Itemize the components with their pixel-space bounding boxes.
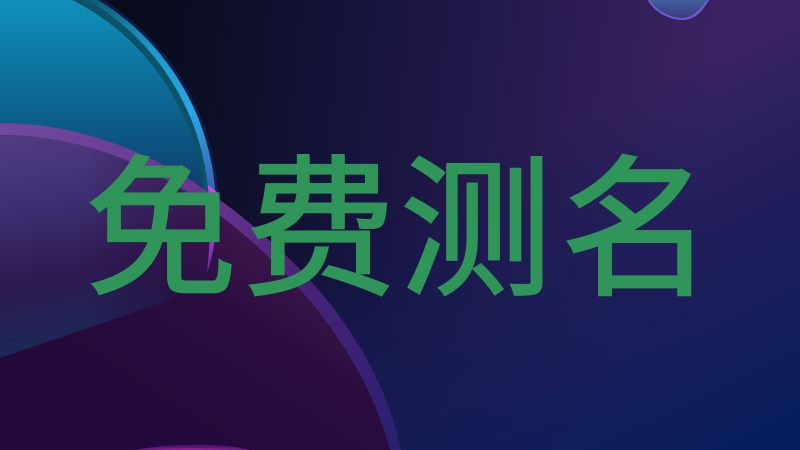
purple sphere bbox=[0, 123, 401, 450]
teal sphere bbox=[0, 0, 219, 450]
rim highlight crossing bbox=[207, 185, 218, 273]
bubble at top right bbox=[648, 0, 709, 20]
upper left sheen bbox=[0, 135, 190, 358]
bottom glow arc bbox=[135, 445, 250, 450]
title: 免费测名 bbox=[85, 146, 713, 316]
